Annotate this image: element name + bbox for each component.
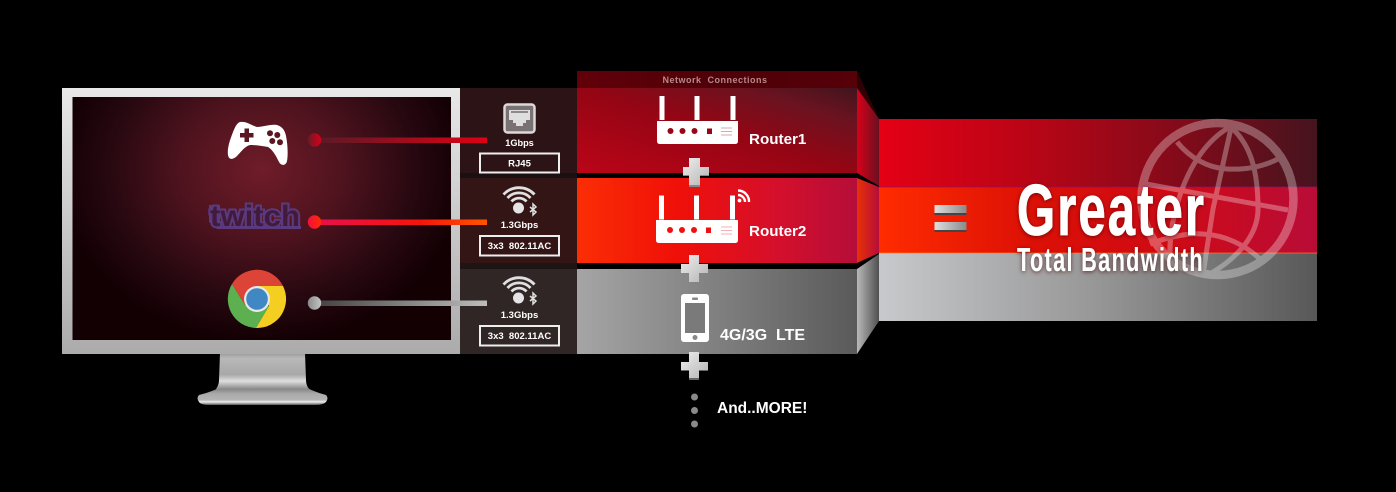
connector line: twitch to wifi xyxy=(308,215,487,229)
label: 1Gbps: 1Gbps xyxy=(505,138,534,148)
monitor screen xyxy=(72,97,451,340)
label: Router1: Router1 xyxy=(749,131,807,148)
panel: network connections header: Network Connections xyxy=(662,75,768,85)
icon: wifi and bluetooth 1 xyxy=(504,188,536,215)
panel: router 1 xyxy=(577,88,879,186)
icon: twitch logo: twitch xyxy=(210,200,300,233)
icon: smartphone xyxy=(681,294,709,342)
monitor stand xyxy=(198,353,328,405)
label: 1.3Gbps cellular: 1.3Gbps xyxy=(501,310,538,321)
label box: RJ45 xyxy=(480,154,559,172)
connector line: game to RJ45 xyxy=(308,133,487,147)
label box: 3x3 802.11AC: 3x3 802.11AC xyxy=(488,331,551,342)
panel: network connections header xyxy=(577,71,879,119)
subheading: Total Bandwidth: Total Bandwidth xyxy=(1017,241,1204,278)
icon: router 1 xyxy=(657,96,738,144)
icon: RJ45 port xyxy=(504,104,534,132)
panel: router 2 xyxy=(577,178,879,263)
icon: ellipsis dots xyxy=(691,394,698,428)
monitor xyxy=(62,88,460,405)
label: 1.3Gbps router 2: 1.3Gbps xyxy=(501,220,538,231)
icon: router 2 xyxy=(656,196,738,243)
icon: plus 1 xyxy=(683,158,709,187)
label box: RJ45: RJ45 xyxy=(508,158,532,170)
panel: 4G/3G LTE xyxy=(577,254,879,354)
icon: equals sign xyxy=(934,205,966,232)
label: Router2: Router2 xyxy=(749,223,806,240)
label: 4G/3G LTE: 4G/3G LTE xyxy=(720,327,805,344)
connector line: chrome to wifi xyxy=(308,296,487,310)
icon: chrome logo xyxy=(228,270,286,328)
panel: connection interfaces xyxy=(460,88,577,354)
icon: wireless signal xyxy=(738,190,749,202)
label: And..MORE!: And..MORE! xyxy=(717,400,807,417)
panel: total bandwidth block xyxy=(879,119,1317,321)
icon: globe xyxy=(1142,123,1294,275)
icon: plus 2 xyxy=(681,255,708,282)
label box: 3x3 802.11AC xyxy=(480,326,559,346)
monitor bezel xyxy=(62,88,460,354)
icon: plus 3 xyxy=(681,352,708,380)
icon: game controller xyxy=(228,122,288,165)
icon: wifi and bluetooth 2 xyxy=(504,278,536,304)
label box: 3x3 802.11AC: 3x3 802.11AC xyxy=(488,241,551,252)
heading: Greater: Greater xyxy=(1017,171,1206,251)
label box: 3x3 802.11AC xyxy=(480,236,559,256)
